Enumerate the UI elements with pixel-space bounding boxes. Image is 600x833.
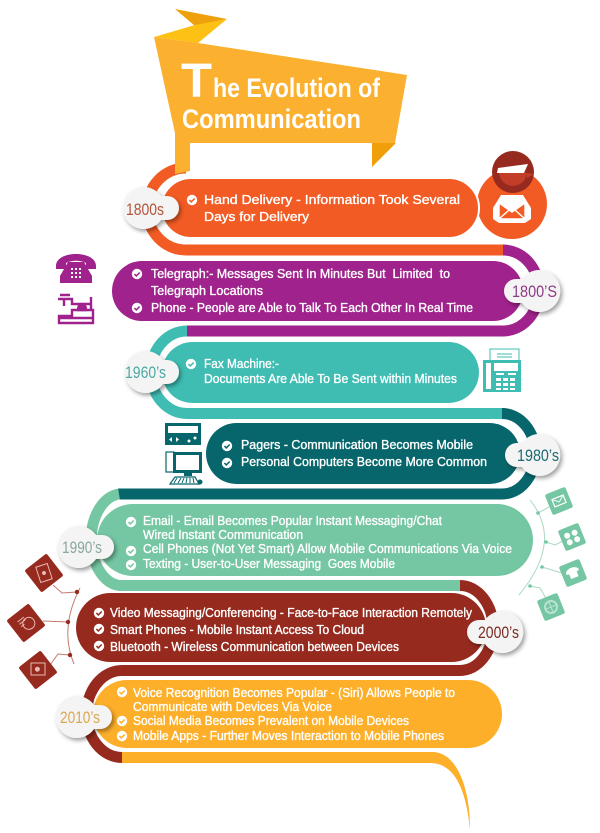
title text: Communication (182, 104, 361, 134)
badge: 1990's: 1990’s (62, 539, 102, 557)
title text (181, 55, 381, 134)
panel: 1980's pagers and computers (206, 423, 520, 484)
panel: 2000's video, smart phones, bluetooth (76, 593, 486, 662)
badge: 2010's (56, 696, 112, 738)
text: 2000's items: Bluetooth - Wireless Communication between Devices (110, 639, 399, 654)
icon: green network sphere (537, 593, 565, 621)
badge: 2000's (467, 611, 523, 653)
icon: green phone (559, 559, 587, 587)
ribbon: 2010's yellow tail (122, 752, 470, 829)
text: telegraph and phone: Telegraph Locations (151, 283, 263, 298)
text: 2000's items: Smart Phones - Mobile Instant Access To Cloud (110, 622, 364, 637)
icon group: green network (519, 487, 587, 621)
text: 2000's items (110, 605, 473, 654)
title text: he Evolution of (213, 73, 381, 103)
ribbon: 1980's dark teal (118, 414, 535, 494)
icon: red cloud document (6, 603, 46, 643)
badge: 1980's (505, 434, 560, 476)
ribbon: 1990's green (91, 494, 460, 586)
check bullet (187, 195, 197, 205)
check bullets (126, 517, 136, 570)
ribbon: 1800s orange (147, 168, 503, 250)
text: 2010's items: Social Media Becomes Prevalent on Mobile Devices (133, 713, 409, 728)
text: 2010's items: Voice Recognition Becomes Popular - (Siri) Allows People to (133, 685, 455, 700)
text: 2010's items: Communicate with Devices Via Voice (133, 699, 332, 714)
text: pagers and computers (241, 437, 487, 469)
text: 2000's items: Video Messaging/Conferencing - Face-to-Face Interaction Remotely (110, 605, 473, 620)
badge: 1960's: 1960’s (125, 364, 166, 382)
ribbon: 1800's purple (187, 250, 539, 331)
icon: mail carrier circle (477, 151, 547, 239)
icon: pager (165, 423, 201, 445)
text: hand delivery: Hand Delivery - Information Took Several (204, 192, 460, 207)
badge: 1800s (123, 187, 179, 229)
text: fax machine (204, 356, 457, 386)
text: telegraph and phone: Phone - People are Able to Talk To Each Other In Real Time (151, 300, 473, 315)
text: hand delivery: Days for Delivery (204, 209, 310, 224)
badge: 1960's (125, 351, 179, 393)
text: telegraph and phone (151, 266, 473, 315)
text: 1990's items: Email - Email Becomes Popular Instant Messaging/Chat (143, 513, 442, 528)
panel: 1990's email, phones, texting (97, 504, 533, 576)
text: 1990's items: Wired Instant Communication (143, 527, 303, 542)
text: telegraph and phone: Telegraph:- Messages Sent In Minutes But Limited to (151, 266, 450, 281)
badge: 1800'S: 1800’S (512, 283, 557, 301)
title banner (154, 9, 407, 174)
badge: 1980's: 1980’s (517, 447, 559, 465)
icon: green people (558, 523, 586, 551)
panel: 1800's telegraph and phone (112, 261, 523, 321)
text: 1990's items: Cell Phones (Not Yet Smart) Allow Mobile Communications Via Voice (143, 541, 512, 556)
badge: 2010's: 2010’s (60, 709, 100, 727)
icon: red video chat (18, 650, 58, 690)
text: 1990's items: Texting - User-to-User Messaging Goes Mobile (143, 556, 395, 571)
text: pagers and computers: Personal Computers Become More Common (241, 454, 487, 469)
icon: telephone (56, 254, 96, 283)
icon: green mail (545, 487, 573, 515)
text: pagers and computers: Pagers - Communication Becomes Mobile (241, 437, 473, 452)
title text: T (181, 55, 212, 108)
check bullets (132, 269, 142, 313)
badge: 2000's: 2000’s (478, 624, 519, 642)
check bullets (94, 608, 104, 651)
panel: 2010's voice, social, apps (93, 680, 502, 748)
text: fax machine: Documents Are Able To Be Sent within Minutes (204, 371, 457, 386)
icon group: red network (6, 553, 80, 690)
text: 2010's items: Mobile Apps - Further Moves Interaction to Mobile Phones (133, 728, 444, 743)
ribbon: 2000's red (87, 586, 493, 758)
badge: 1990's (58, 526, 114, 568)
check bullets (117, 687, 127, 741)
text: 1990's items (143, 513, 512, 571)
icon: desktop computer (166, 452, 202, 484)
check bullets (222, 441, 232, 468)
text: 2010's items (133, 685, 455, 743)
text: fax machine: Fax Machine:- (204, 356, 279, 371)
panel: 1960's fax machine (162, 342, 479, 403)
check bullet (186, 359, 196, 369)
panel: 1800s hand delivery (161, 178, 479, 238)
icon: red tablet (24, 553, 64, 593)
ribbon: 1960's teal (151, 331, 502, 414)
icon: fax machine (483, 349, 521, 392)
icon: telegraph (58, 295, 93, 323)
badge: 1800s: 1800s (126, 201, 164, 219)
badge: 1800'S (504, 270, 560, 312)
text: hand delivery (204, 192, 460, 224)
